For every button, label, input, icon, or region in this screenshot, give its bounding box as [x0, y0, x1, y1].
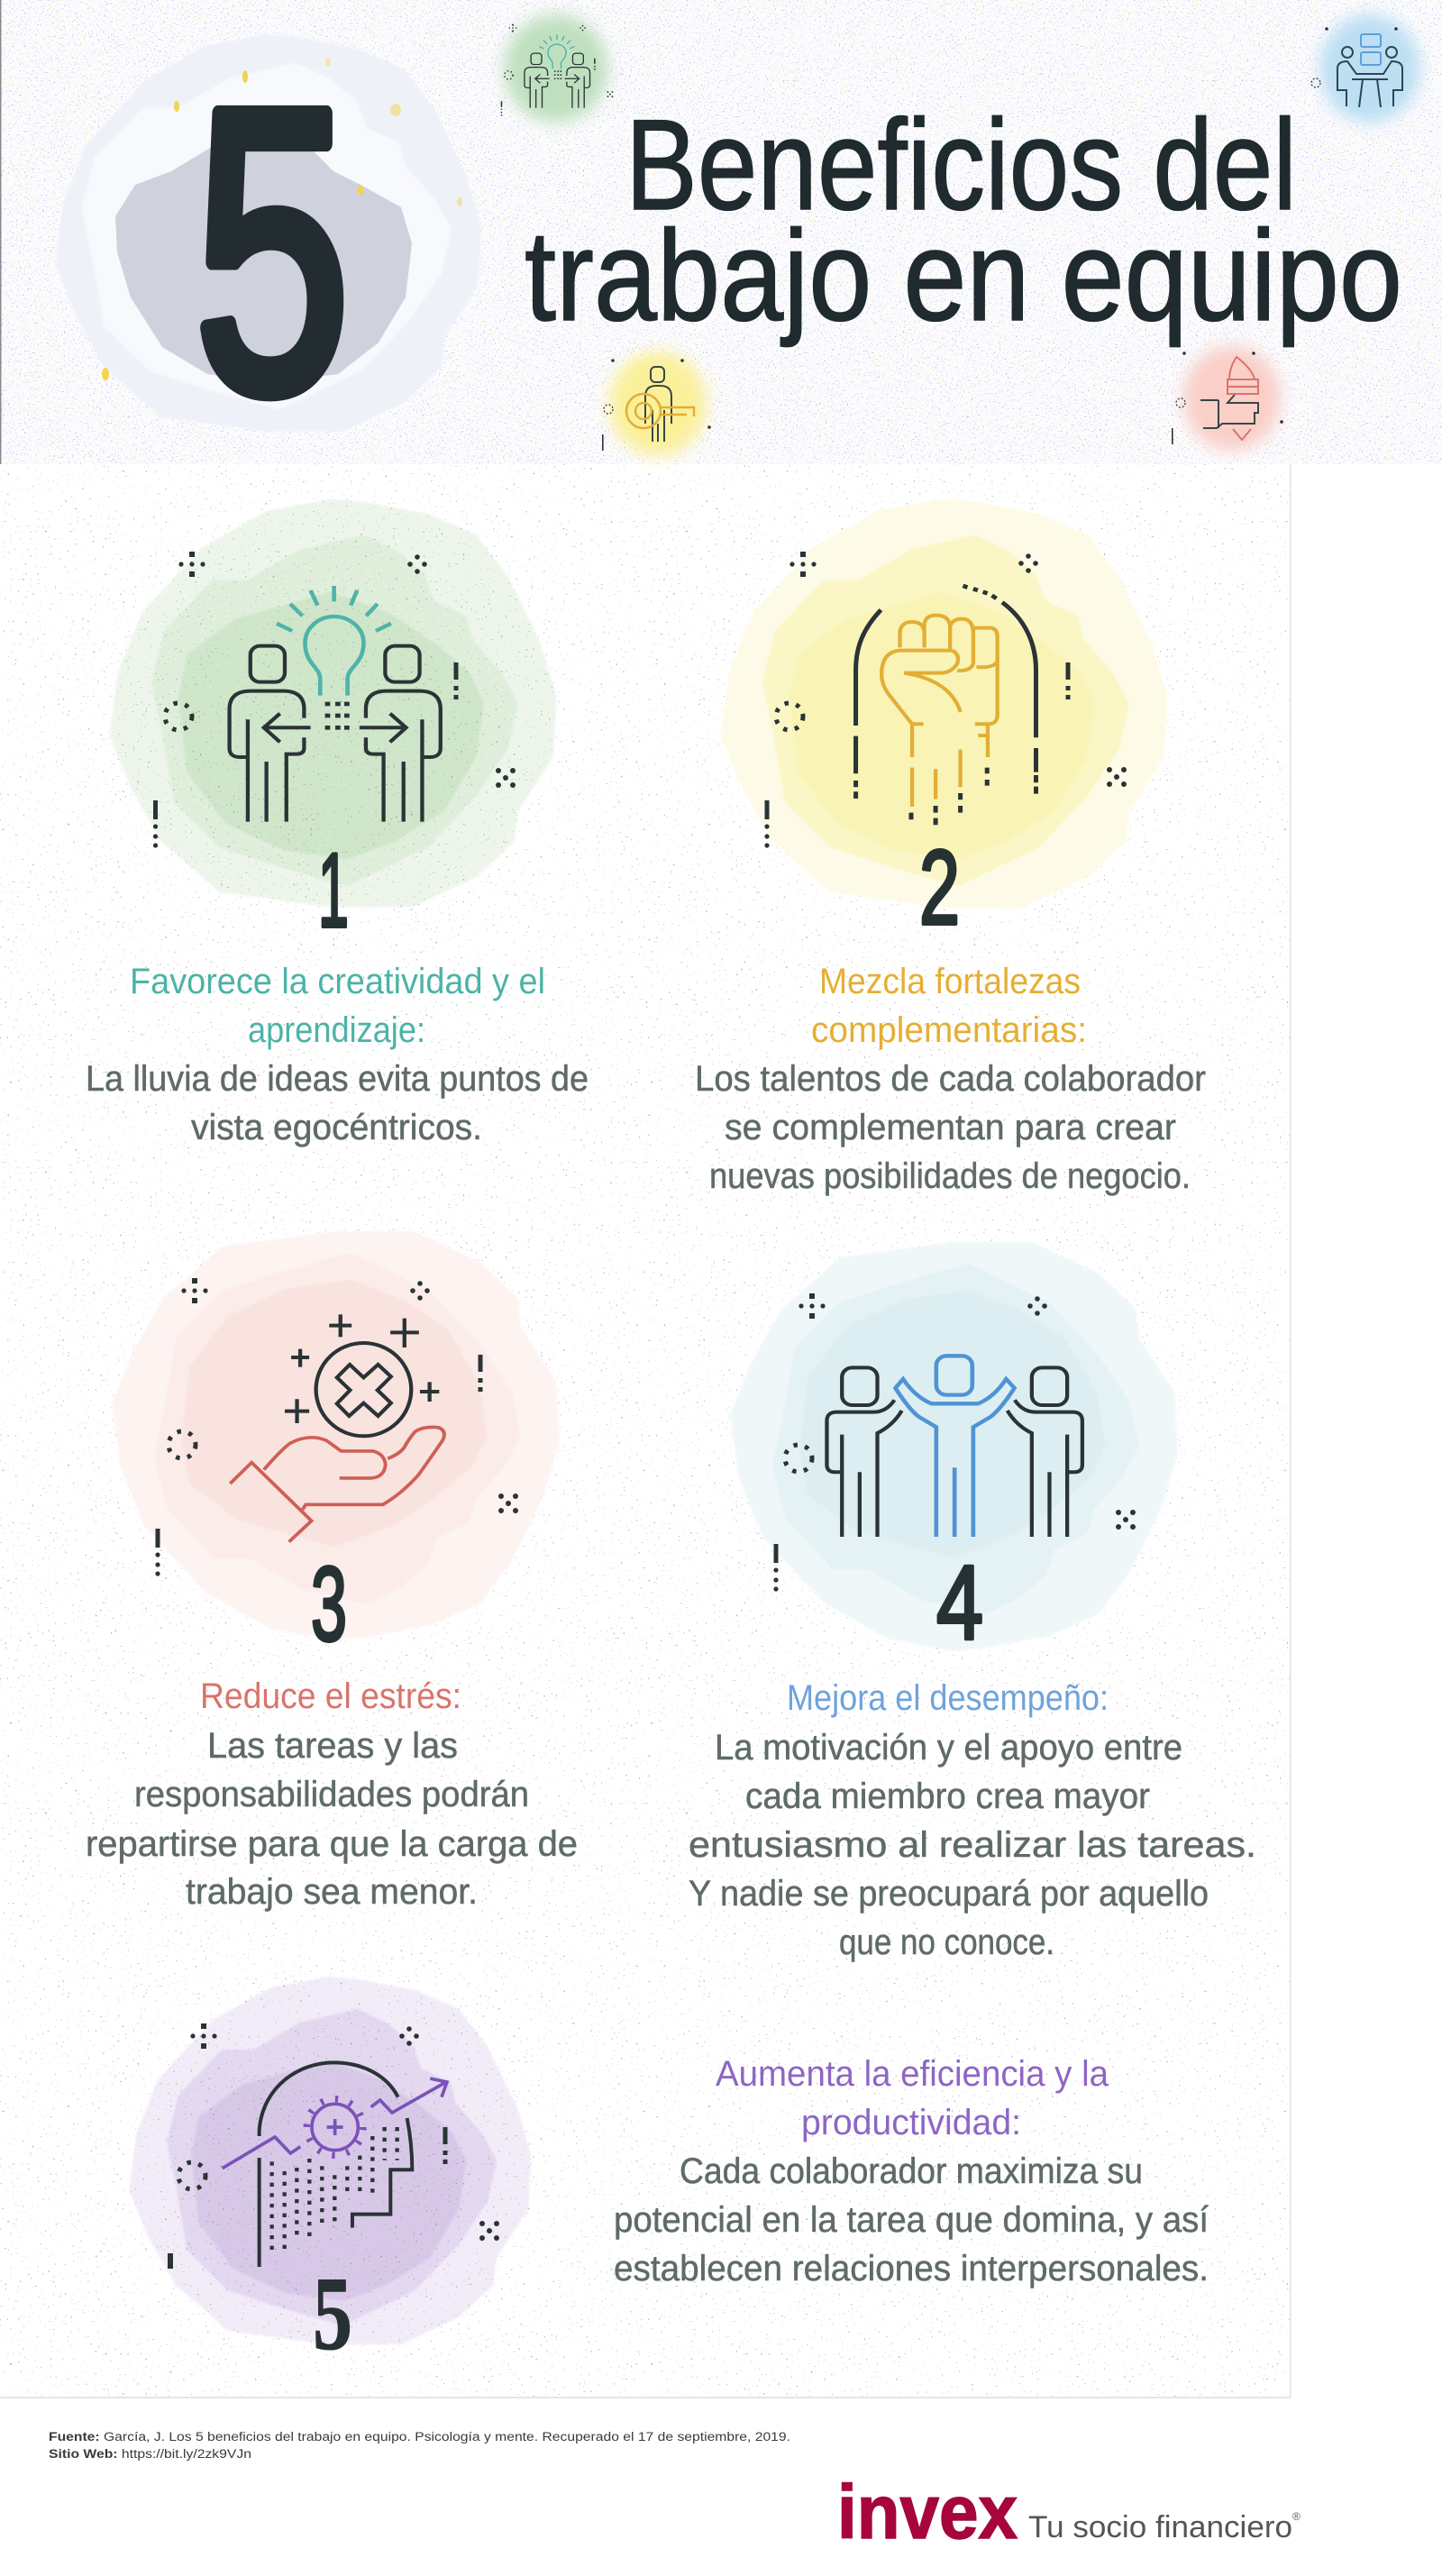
decorative marks 5 — [168, 2023, 499, 2269]
source citation: Sitio Web: https://bit.ly/2zk9VJn — [49, 2447, 251, 2461]
text block 4: Mejora el desempeño: — [787, 1678, 1109, 1718]
badge: green ideas — [501, 14, 613, 123]
icon: two people sharing an idea — [153, 552, 516, 848]
logo: invex: ® — [1292, 2510, 1301, 2523]
text block 4: que no conoce. — [839, 1923, 1054, 1962]
text block 3: responsabilidades podrán — [134, 1775, 529, 1814]
text block 2: se complementan para crear — [725, 1108, 1176, 1147]
text block 1: La lluvia de ideas evita puntos de — [86, 1059, 589, 1099]
text block 2: nuevas posibilidades de negocio. — [709, 1156, 1191, 1196]
logo: invex — [837, 2470, 1301, 2554]
text block 3: Las tareas y las — [207, 1726, 458, 1766]
blob: blue — [730, 1242, 1178, 1651]
panel: benefit 1 — [86, 498, 589, 1147]
text block 2: Los talentos de cada colaborador — [695, 1059, 1206, 1099]
text block 5 — [614, 2054, 1209, 2288]
blob: purple — [129, 1977, 531, 2344]
decorative marks 2 — [764, 552, 1127, 848]
big number five: 5 — [195, 27, 350, 475]
icon: team of three — [826, 1356, 1082, 1537]
badge: yellow key — [602, 352, 711, 456]
blob: yellow — [720, 498, 1168, 908]
text block 4: Y nadie se preocupará por aquello — [689, 1874, 1209, 1914]
text block 1: aprendizaje: — [248, 1010, 425, 1050]
title line one: Beneficios del — [625, 94, 1297, 237]
panel: header — [0, 0, 1442, 475]
text block 4 — [689, 1678, 1256, 1962]
text block 3: repartirse para que la carga de — [86, 1824, 578, 1864]
panel: speckled content background — [0, 464, 1291, 2398]
text block 5: establecen relaciones interpersonales. — [614, 2249, 1209, 2288]
number 2: 2 — [919, 828, 960, 946]
number 3: 3 — [311, 1545, 347, 1663]
text block 4: La motivación y el apoyo entre — [715, 1728, 1182, 1768]
panel: benefit 3 — [86, 1231, 578, 1912]
logo: invex: Tu socio financiero — [1028, 2510, 1292, 2544]
logo: invex: invex — [837, 2470, 1018, 2554]
text block 5: potencial en la tarea que domina, y así — [614, 2200, 1209, 2240]
text block 3: trabajo sea menor. — [186, 1872, 478, 1912]
number 5: 5 — [313, 2256, 352, 2372]
header blob behind number — [55, 34, 481, 432]
icon: head with gear and growth arrow — [223, 2062, 447, 2267]
source citation — [49, 2430, 790, 2461]
decorative marks 3 — [155, 1278, 518, 1576]
text block 5: Cada colaborador maximiza su — [680, 2151, 1143, 2191]
text block 4: entusiasmo al realizar las tareas. — [689, 1825, 1256, 1865]
blob: green — [109, 498, 557, 908]
panel: benefit 5 — [129, 1977, 1209, 2372]
text block 5: Aumenta la eficiencia y la — [716, 2054, 1109, 2094]
text block 3 — [86, 1676, 578, 1912]
source citation: Fuente: García, J. Los 5 beneficios del trabajo en equipo. Psicología y mente. Recuperado el 17 de septiembre, 2019. — [49, 2430, 790, 2444]
badge: blue meeting — [1311, 14, 1420, 123]
text block 2 — [695, 962, 1206, 1196]
icon: hand holding stress symbol — [230, 1314, 444, 1542]
number 1: 1 — [318, 831, 349, 949]
panel: benefit 4 — [689, 1242, 1256, 1962]
badge: red thumbs up — [1172, 346, 1283, 451]
text block 1: vista egocéntricos. — [191, 1108, 482, 1147]
text block 1 — [86, 962, 589, 1147]
text block 2: complementarias: — [811, 1010, 1087, 1050]
text block 2: Mezcla fortalezas — [819, 962, 1081, 1001]
number 4: 4 — [936, 1543, 983, 1661]
panel: benefit 2 — [695, 498, 1206, 1196]
text block 4: cada miembro crea mayor — [745, 1777, 1150, 1816]
icon: raised fist — [856, 586, 1036, 825]
text block 3: Reduce el estrés: — [200, 1676, 461, 1716]
text block 1: Favorece la creatividad y el — [130, 962, 545, 1001]
decorative marks 4 — [773, 1293, 1136, 1592]
blob: red — [112, 1231, 560, 1640]
text block 5: productividad: — [801, 2103, 1021, 2142]
